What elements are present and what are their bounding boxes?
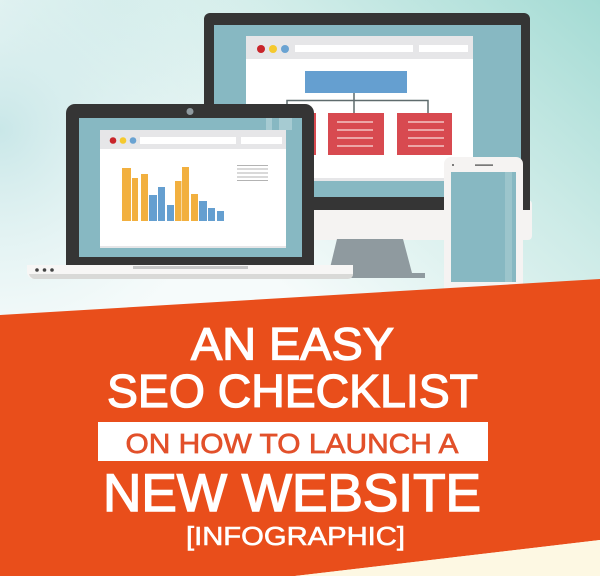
infographic tag: [INFOGRAPHIC] [186, 521, 405, 551]
laptop screen [79, 118, 302, 257]
cream corner [295, 540, 600, 576]
text lines [237, 166, 268, 180]
orange title panel [0, 279, 600, 576]
browser window [100, 130, 286, 248]
browser window [246, 36, 473, 181]
title [98, 318, 488, 551]
monitor chin [204, 200, 532, 240]
monitor stand [330, 239, 425, 278]
monitor screen [214, 25, 521, 197]
screen reflection [266, 118, 292, 130]
laptop base [27, 265, 353, 279]
icon: smartphone [444, 157, 523, 297]
icon: desktop monitor [204, 13, 532, 278]
bar chart [122, 167, 224, 221]
subtitle banner [98, 422, 488, 461]
background gradient [0, 0, 600, 330]
heading line: New Website: NEW WEBSITE [103, 464, 481, 523]
icon: laptop [27, 104, 353, 279]
heading line: An Easy: AN EASY [191, 318, 394, 370]
laptop bezel [66, 104, 314, 266]
heading line: SEO Checklist: SEO CHECKLIST [107, 365, 478, 417]
monitor bezel [204, 13, 530, 210]
sitemap diagram [259, 71, 452, 155]
subtitle banner: ON HOW TO LAUNCH A [126, 428, 459, 459]
laptop camera [186, 108, 194, 115]
